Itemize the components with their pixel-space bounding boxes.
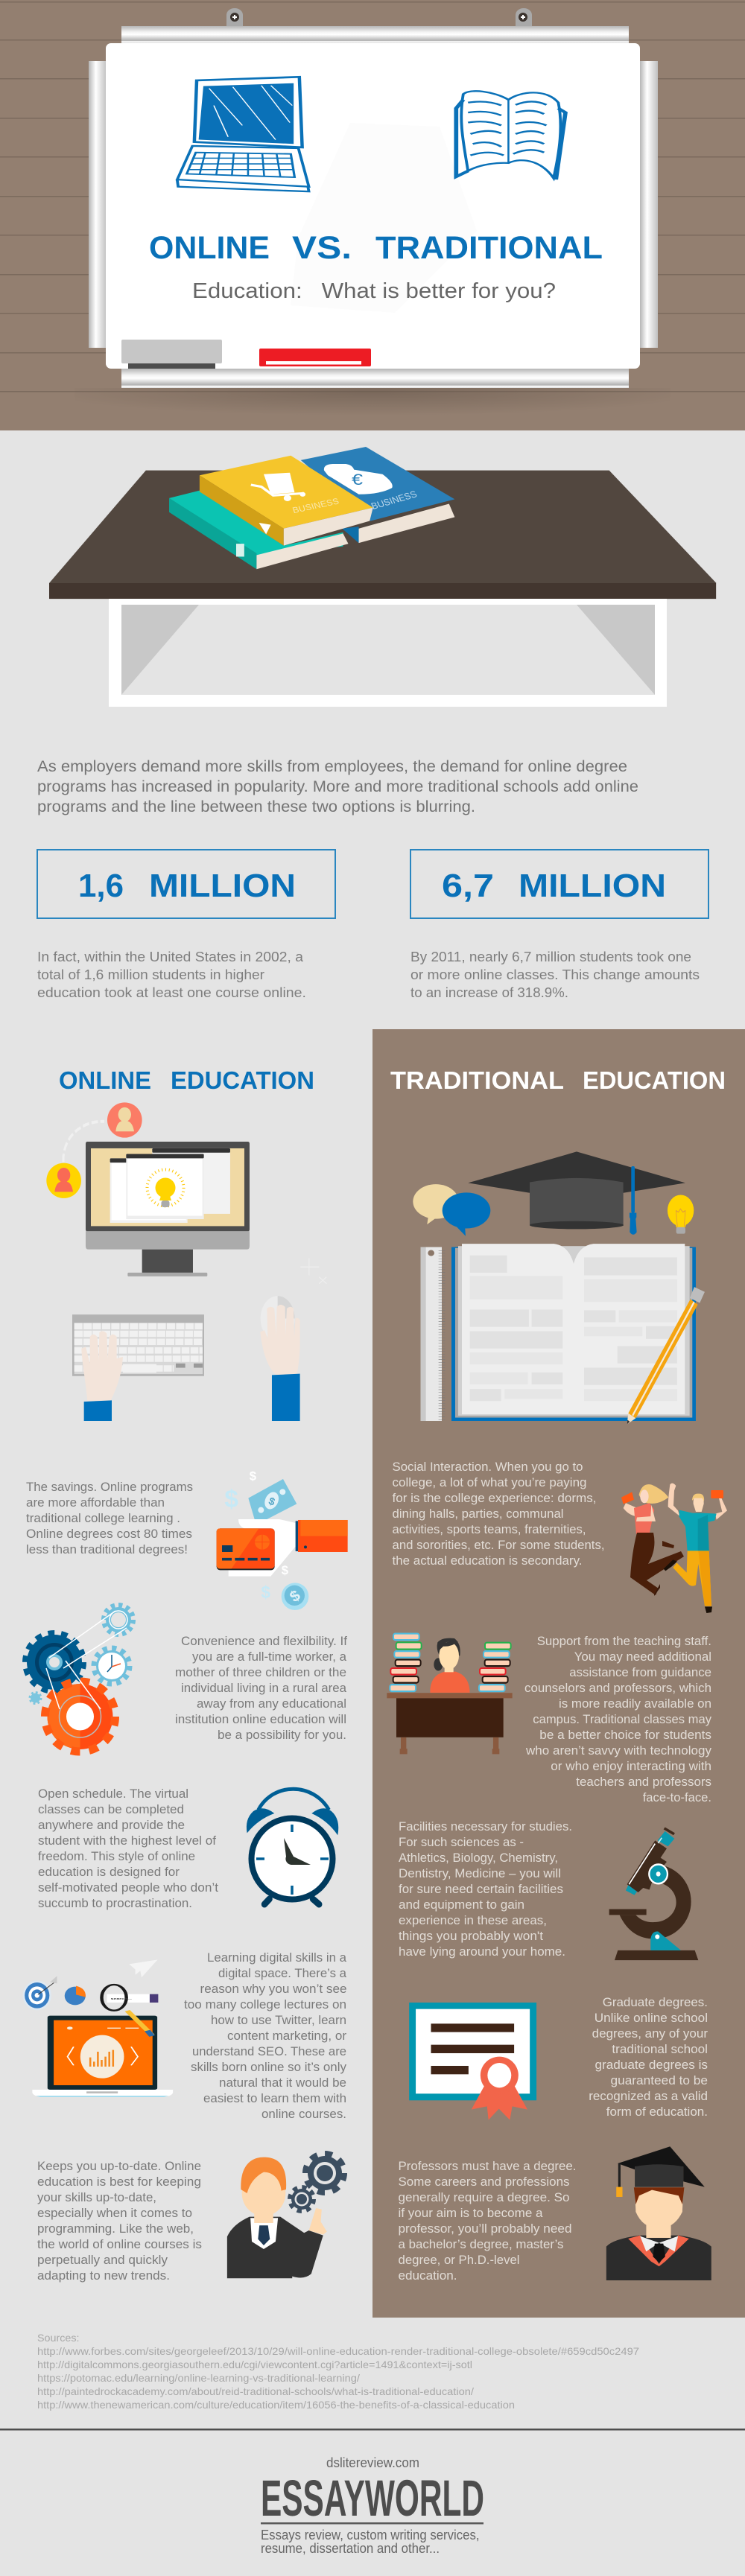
icon: hand with credit card and money: $	[267, 1495, 277, 1508]
text: keeps you up-to-date: programming. Like the web,	[37, 2222, 194, 2236]
text: support from the teaching staff: face-to-face.	[643, 1790, 711, 1804]
icon: teacher at desk with book stacks	[387, 1634, 513, 1754]
icon: gears and clock	[25, 1606, 133, 1752]
text: learning digital skills: too many college lectures on	[184, 1997, 346, 2011]
text: keeps you up-to-date: your skills up-to-date,	[37, 2190, 156, 2204]
text: support from the teaching staff: or who enjoy interacting with	[551, 1759, 711, 1773]
text: facilities necessary for studies: Facilities necessary for studies.	[399, 1819, 572, 1834]
footer tagline: resume, dissertation and other...	[261, 2541, 440, 2556]
text: professors must have a degree: a bachelor’s degree, master’s	[398, 2237, 563, 2251]
text: learning digital skills: content marketing, or	[227, 2029, 346, 2043]
text: social interaction	[392, 1460, 605, 1568]
text: open schedule: anywhere and provide the	[38, 1818, 185, 1832]
text: graduate degrees: degrees, any of your	[592, 2026, 708, 2041]
stat box: 1,6 million	[37, 850, 335, 918]
text: support from the teaching staff: assistance from guidance	[569, 1665, 711, 1679]
text: professors must have a degree: Professors must have a degree.	[398, 2159, 577, 2173]
whiteboard surface	[106, 43, 640, 369]
text: support from the teaching staff: campus. Traditional classes may	[533, 1712, 711, 1726]
subtitle: Education: What is better for you?	[192, 279, 556, 303]
left book stack	[390, 1634, 422, 1691]
icon: open book	[451, 1244, 696, 1421]
text: learning digital skills: skills born online so it’s only	[191, 2060, 346, 2074]
stat text left: education took at least one course online.	[37, 985, 306, 1000]
text: learning digital skills: Learning digital skills in a	[207, 1950, 347, 1965]
text: graduate degrees: Graduate degrees.	[603, 1995, 708, 2009]
text: graduate degrees: graduate degrees is	[595, 2058, 708, 2072]
text: open schedule: classes can be completed	[38, 1802, 184, 1816]
text: convenience and flexibility: individual living in a rural area	[181, 1681, 347, 1695]
text: professors must have a degree: if your aim is to become a	[398, 2206, 543, 2220]
text: professors must have a degree	[398, 2159, 577, 2283]
text: open schedule	[38, 1787, 218, 1910]
text: open schedule: succumb to procrastination.	[38, 1896, 192, 1910]
sources list: http://www.thenewamerican.com/culture/education/item/16056-the-benefits-of-a-classical-education	[37, 2399, 515, 2411]
text: facilities necessary for studies: things you probably won't	[399, 1929, 543, 1943]
icon: businessman with gears	[227, 2154, 344, 2278]
sources list	[37, 2332, 639, 2411]
stat text right	[410, 949, 700, 1000]
stack of books: €	[352, 471, 364, 489]
text: open schedule: self-motivated people who don’t	[38, 1880, 218, 1895]
text: keeps you up-to-date: perpetually and quickly	[37, 2253, 168, 2267]
table frame	[109, 599, 667, 707]
icon: alarm clock	[247, 1789, 338, 1904]
text: graduate degrees: Unlike online school	[595, 2011, 708, 2025]
footer tagline	[261, 2528, 480, 2556]
text: facilities necessary for studies: for sure need certain facilities	[399, 1882, 563, 1896]
stat text left: In fact, within the United States in 2002, a	[37, 949, 304, 964]
text: facilities necessary for studies: Dentistry, Medicine – you will	[399, 1866, 561, 1880]
icon: light bulb	[668, 1195, 694, 1234]
text: convenience and flexibility: mother of three children or the	[175, 1665, 346, 1679]
stat text right: By 2011, nearly 6,7 million students took one	[410, 949, 691, 964]
text: support from the teaching staff: who aren’t savvy with technology	[525, 1743, 711, 1758]
desk	[387, 1693, 513, 1754]
text: convenience and flexibility: Convenience and flexilbility. If	[181, 1634, 347, 1648]
text: facilities necessary for studies: have lying around your home.	[399, 1944, 565, 1959]
icon: sketched open book	[456, 91, 565, 179]
text: convenience and flexibility: away from any educational	[197, 1696, 346, 1711]
text: social interaction: and sororities, etc. For some students,	[392, 1538, 605, 1552]
heading: traditional education	[390, 1066, 726, 1094]
icon: hand with credit card and money: $	[261, 1583, 270, 1602]
intro text block: As employers demand more skills from employees, the demand for online degree	[37, 758, 627, 775]
header: wooden wall with whiteboard	[0, 0, 745, 430]
icon: graduation cap, speech bubbles, bulb, open book, ruler and pencil	[413, 1151, 705, 1424]
text: graduate degrees: guaranteed to be	[611, 2073, 708, 2087]
text: learning digital skills: easiest to learn them with	[203, 2091, 346, 2105]
text: facilities necessary for studies: Athletics, Biology, Chemistry,	[399, 1851, 558, 1865]
right book stack	[479, 1643, 511, 1691]
stat box: 6,7 million	[410, 850, 708, 918]
icon: hand with credit card and money	[217, 1469, 348, 1610]
heading: online education: EDUCATION	[171, 1066, 314, 1094]
text: facilities necessary for studies: For such sciences as -	[399, 1835, 524, 1849]
stack of books	[169, 447, 454, 569]
icon: jumping students	[621, 1483, 727, 1613]
icon: sketched laptop	[177, 77, 309, 191]
red marker	[259, 349, 371, 366]
text: professors must have a degree: Some careers and professions	[398, 2175, 569, 2189]
icon: laptop with analytics and search: search...	[111, 1997, 133, 2000]
text: graduate degrees	[589, 1995, 708, 2119]
text: facilities necessary for studies: and equipment to gain	[399, 1898, 524, 1912]
faint smudge	[291, 123, 477, 313]
text: support from the teaching staff: is more readily available on	[559, 1696, 711, 1711]
stack of books: BUSINESS	[291, 497, 340, 515]
text: keeps you up-to-date: the world of online courses is	[37, 2237, 202, 2251]
text: convenience and flexibility: you are a full-time worker, a	[192, 1650, 347, 1664]
text: open schedule: student with the highest level of	[38, 1834, 216, 1848]
sources list: Sources:	[37, 2332, 79, 2344]
text: professors must have a degree: education.	[398, 2268, 457, 2283]
sources list: https://potomac.edu/learning/online-learning-vs-traditional-learning/	[37, 2372, 360, 2384]
stat text left	[37, 949, 306, 1000]
text: social interaction: dining halls, parties, communal	[392, 1507, 563, 1521]
sources list: http://www.forbes.com/sites/georgeleef/2013/10/29/will-online-education-render-traditional-college-obsolete/#659cd50c2497	[37, 2345, 639, 2357]
text: graduate degrees: recognized as a valid	[589, 2089, 708, 2103]
stat box: 6,7 million: MILLION	[519, 868, 666, 904]
heading: traditional education: TRADITIONAL	[390, 1066, 564, 1094]
text: the savings: traditional college learning .	[26, 1511, 180, 1525]
icon: graduation cap	[468, 1151, 685, 1235]
icon: hand with credit card and money: $	[287, 1586, 304, 1606]
text: social interaction: activities, sports teams, fraternities,	[392, 1522, 586, 1536]
title: ONLINE	[149, 230, 270, 266]
text: convenience and flexibility	[175, 1634, 347, 1742]
text: support from the teaching staff: You may need additional	[574, 1650, 711, 1664]
icon: microscope	[609, 1828, 698, 1960]
text: social interaction: for is the college experience: dorms,	[392, 1491, 596, 1505]
teacher	[430, 1638, 470, 1693]
sources list: http://paintedrockacademy.com/about/reid-traditional-schools/what-is-traditional-education/	[37, 2385, 474, 2397]
text: professors must have a degree: professor, you’ll probably need	[398, 2222, 572, 2236]
text: facilities necessary for studies	[399, 1819, 572, 1959]
sources list: http://digitalcommons.georgiasouthern.edu/cgi/viewcontent.cgi?article=1491&context=ij-sotl	[37, 2359, 472, 2370]
icon: hand with credit card and money: $	[282, 1563, 289, 1577]
illustration: table with books	[49, 447, 716, 707]
heading: online education	[59, 1066, 314, 1094]
text: convenience and flexibility: institution online education will	[175, 1712, 346, 1726]
text: the savings: are more affordable than	[26, 1495, 165, 1510]
stack of books: BUSINESS	[370, 489, 419, 512]
intro text block	[37, 758, 638, 815]
heading: traditional education: EDUCATION	[583, 1066, 726, 1094]
footer site url: dslitereview.com	[326, 2455, 419, 2470]
text: the savings: The savings. Online programs	[26, 1480, 193, 1494]
woman	[621, 1484, 668, 1534]
icon: light bulb on screen	[148, 1169, 183, 1207]
text: open schedule: Open schedule. The virtual	[38, 1787, 188, 1801]
icon: hand on keyboard	[72, 1314, 204, 1421]
panel: traditional education background	[372, 1029, 745, 2318]
board rails	[89, 26, 658, 388]
text: keeps you up-to-date: adapting to new trends.	[37, 2268, 170, 2283]
icon: speech bubbles	[413, 1184, 490, 1236]
stat box: 1,6 million: MILLION	[149, 868, 296, 904]
text: keeps you up-to-date: education is best for keeping	[37, 2175, 201, 2189]
title: VS.	[292, 230, 352, 266]
text: open schedule: freedom. This style of online	[38, 1849, 195, 1863]
text: open schedule: education is designed for	[38, 1865, 180, 1879]
text: keeps you up-to-date	[37, 2159, 202, 2283]
stat text right: to an increase of 318.9%.	[410, 985, 568, 1000]
icon: diploma certificate	[409, 2003, 536, 2120]
text: the savings: Online degrees cost 80 times	[26, 1527, 192, 1541]
stat box: 6,7 million: 6,7	[442, 868, 494, 904]
text: graduate degrees: traditional school	[612, 2042, 708, 2056]
text: graduate degrees: form of education.	[606, 2105, 708, 2119]
text: social interaction: Social Interaction. When you go to	[392, 1460, 583, 1474]
text: learning digital skills: online courses.	[261, 2107, 346, 2121]
intro text block: programs has increased in popularity. More and more traditional schools add online	[37, 778, 638, 795]
icon: graduate with cap and gown	[606, 2146, 711, 2280]
stat text right: or more online classes. This change amounts	[410, 967, 700, 982]
text: facilities necessary for studies: experience in these areas,	[399, 1913, 547, 1927]
text: support from the teaching staff: be a better choice for students	[539, 1728, 711, 1742]
text: learning digital skills: understand SEO. These are	[192, 2044, 346, 2058]
icon: laptop with analytics and search	[23, 1976, 173, 2097]
text: support from the teaching staff: Support from the teaching staff.	[537, 1634, 711, 1648]
icon: pencil	[627, 1287, 705, 1424]
text: learning digital skills: digital space. There’s a	[218, 1966, 347, 1980]
man	[664, 1483, 727, 1613]
text: the savings	[26, 1480, 193, 1556]
text: support from the teaching staff: teachers and professors	[576, 1775, 711, 1789]
text: learning digital skills: natural that it would be	[219, 2076, 346, 2090]
title	[149, 230, 603, 266]
text: learning digital skills: reason why you won’t see	[200, 1982, 347, 1996]
stat text left: total of 1,6 million students in higher	[37, 967, 264, 982]
text: support from the teaching staff: counselors and professors, which	[524, 1681, 711, 1695]
wall hook right	[516, 8, 532, 26]
footer divider	[0, 2429, 745, 2431]
text: convenience and flexibility: be a possibility for you.	[218, 1728, 346, 1742]
text: social interaction: the actual education is secondary.	[392, 1553, 583, 1568]
text: support from the teaching staff	[524, 1634, 711, 1804]
text: professors must have a degree: generally require a degree. So	[398, 2190, 569, 2204]
intro text block: programs and the line between these two options is blurring.	[37, 798, 475, 815]
text: social interaction: college, a lot of what you’re paying	[392, 1475, 587, 1489]
text: professors must have a degree: degree, or Ph.D.-level	[398, 2253, 520, 2267]
wall hook left	[226, 8, 243, 26]
title: TRADITIONAL	[375, 230, 603, 266]
icon: hand with credit card and money: $	[250, 1469, 257, 1483]
text: keeps you up-to-date: especially when it comes to	[37, 2206, 192, 2220]
stat box: 1,6 million: 1,6	[78, 868, 124, 904]
table top	[49, 471, 716, 599]
footer logo: essay world: ESSAYWORLD	[261, 2470, 484, 2527]
icon: paper plane	[129, 1959, 158, 1977]
heading: online education: ONLINE	[59, 1066, 151, 1094]
footer tagline: Essays review, custom writing services,	[261, 2528, 480, 2542]
icon: desktop computer with avatars	[46, 1102, 250, 1276]
text: learning digital skills	[184, 1950, 347, 2121]
eraser	[121, 340, 222, 369]
text: learning digital skills: how to use Twitter, learn	[211, 2013, 346, 2027]
text: the savings: less than traditional degrees!	[26, 1542, 188, 1556]
icon: hand on mouse	[260, 1258, 326, 1421]
text: keeps you up-to-date: Keeps you up-to-date. Online	[37, 2159, 201, 2173]
icon: ruler	[421, 1247, 442, 1421]
icon: hand with credit card and money: $	[224, 1486, 238, 1513]
